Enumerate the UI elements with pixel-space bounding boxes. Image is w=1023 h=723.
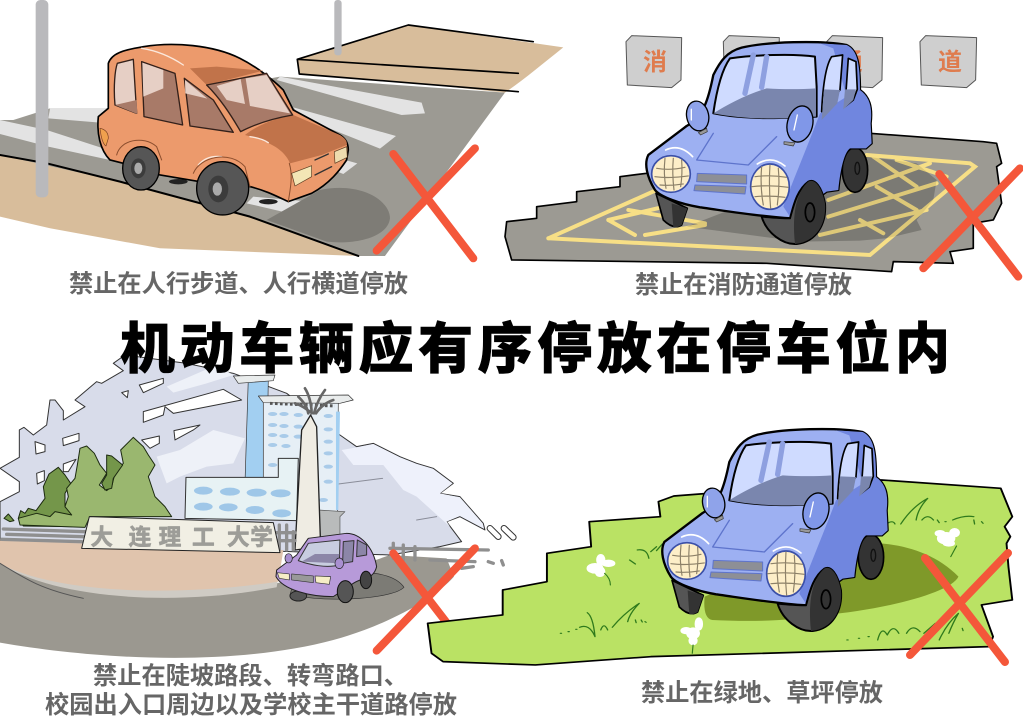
caption: slope, corner and gate (two lines): 校园出入口周边以及学校主干道路停放 xyxy=(45,692,457,719)
title: 机动车辆应有序停放在停车位内 xyxy=(120,318,950,380)
scene: pedestrian walkway and crossing xyxy=(0,0,563,258)
scene: fire lane xyxy=(505,36,1020,277)
flower stems xyxy=(605,546,957,653)
lawn xyxy=(428,480,1012,665)
sign: 通: 通 xyxy=(839,49,863,76)
trees xyxy=(4,437,172,527)
low building xyxy=(185,458,298,521)
caption: fire lane: 禁止在消防通道停放 xyxy=(635,272,852,299)
sign: 消: 消 xyxy=(643,49,667,76)
purple car xyxy=(276,533,404,603)
sign: 道: 道 xyxy=(938,49,962,76)
background building silhouette xyxy=(0,355,485,555)
sign: 防: 防 xyxy=(740,49,764,76)
crosswalk stripes xyxy=(0,77,425,215)
scene: campus gate, slope and corner xyxy=(0,355,513,658)
car shadow xyxy=(687,157,937,242)
university sign: 大连理工大学 xyxy=(90,524,273,550)
grass tufts xyxy=(560,498,983,640)
orange car xyxy=(98,44,348,215)
sign: 通 xyxy=(827,36,883,88)
white flowers xyxy=(588,529,958,644)
yellow grid markings xyxy=(548,155,975,255)
car shadow xyxy=(704,543,958,621)
red cross xyxy=(910,553,1008,662)
flower xyxy=(936,529,958,545)
grey block xyxy=(318,510,345,540)
red cross xyxy=(377,548,475,657)
red cross xyxy=(923,168,1020,277)
lamp poles xyxy=(36,0,342,197)
university sign xyxy=(82,517,280,553)
near sidewalk xyxy=(0,155,358,256)
tan ground with kerb xyxy=(0,541,283,598)
sign: 道 xyxy=(920,36,977,88)
shadow over grid xyxy=(687,157,937,242)
car shadow xyxy=(267,188,390,242)
blue car on lawn xyxy=(662,429,888,631)
flower xyxy=(682,619,702,644)
asphalt pavement xyxy=(505,133,1002,272)
scene: green lawn xyxy=(428,480,1012,665)
red cross xyxy=(377,148,475,258)
caption: lawn: 禁止在绿地、草坪停放 xyxy=(641,680,883,707)
road surface xyxy=(0,77,505,256)
fences xyxy=(2,525,503,568)
caption: walkway: 禁止在人行步道、人行横道停放 xyxy=(69,271,408,298)
caption: slope, corner and gate (two lines): 禁止在陡坡路段、转弯路口、 xyxy=(93,662,408,690)
flower xyxy=(588,555,614,576)
lilac end puffs xyxy=(490,528,513,537)
upper sidewalk xyxy=(297,25,563,93)
blue tower xyxy=(233,375,353,513)
sign: 消 xyxy=(626,36,682,88)
road xyxy=(0,555,454,658)
caption: slope, corner and gate (two lines) xyxy=(45,662,457,719)
obelisk monument xyxy=(295,388,333,550)
sign: 防 xyxy=(723,36,779,88)
blue car xyxy=(646,42,872,244)
wall signs xyxy=(626,36,977,88)
